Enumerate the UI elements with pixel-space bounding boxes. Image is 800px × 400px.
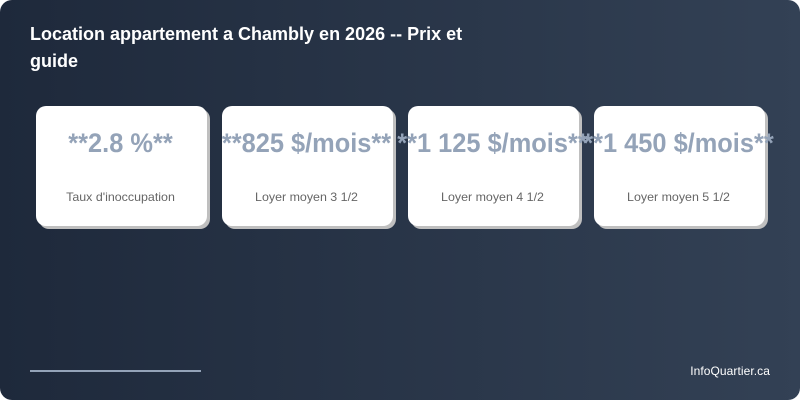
card: average rent 3 1/2	[222, 106, 393, 226]
title: Location appartement a Chambly en 2026 -- Prix et guide	[30, 24, 462, 71]
label: vacancy rate: Taux d'inoccupation	[66, 190, 175, 204]
value: rent 5 1/2: **1 450 $/mois**	[583, 128, 774, 158]
brand name: InfoQuartier.ca	[690, 364, 770, 378]
card: vacancy rate	[36, 106, 207, 226]
card: average rent 5 1/2	[594, 106, 765, 226]
value: rent 3 1/2: **825 $/mois**	[222, 128, 391, 158]
footer accent line	[30, 370, 201, 372]
label: rent 5 1/2: Loyer moyen 5 1/2	[627, 190, 730, 204]
value: vacancy rate: **2.8 %**	[68, 128, 173, 158]
card: average rent 4 1/2	[408, 106, 579, 226]
label: rent 4 1/2: Loyer moyen 4 1/2	[441, 190, 544, 204]
label: rent 3 1/2: Loyer moyen 3 1/2	[255, 190, 358, 204]
value: rent 4 1/2: **1 125 $/mois**	[397, 128, 588, 158]
